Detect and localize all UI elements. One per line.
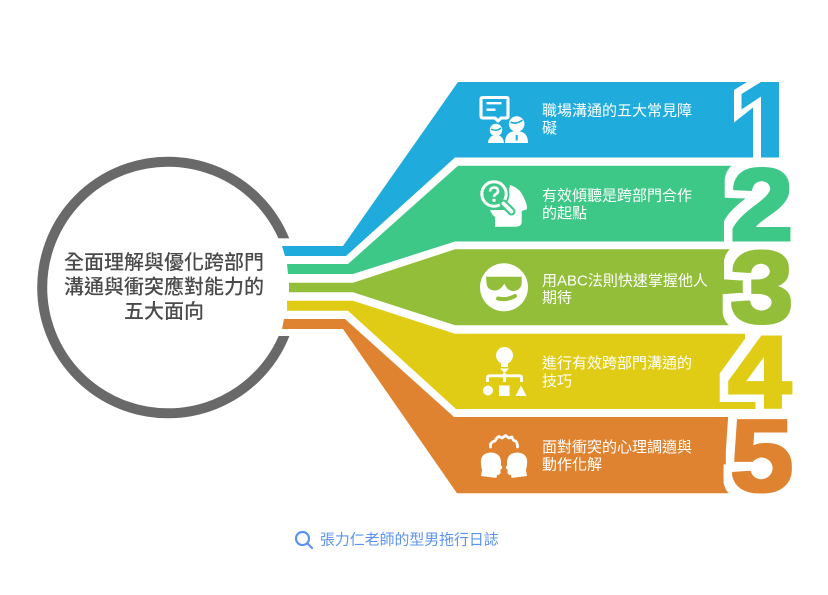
central title: 全面理解與優化跨部門	[64, 251, 264, 274]
band 4	[287, 301, 758, 409]
label 5: 動作化解	[542, 456, 602, 474]
label 2: 有效傾聽是跨部門合作	[542, 188, 692, 204]
label 3	[542, 272, 708, 306]
label 4: 技巧	[542, 373, 572, 390]
panel: step 1	[282, 82, 779, 256]
number 5: 5	[730, 399, 794, 513]
circle ring	[42, 162, 302, 413]
panel: step 3	[289, 230, 794, 344]
label 5	[542, 438, 692, 474]
label 4: 進行有效跨部門溝通的	[542, 355, 692, 372]
number 1: 1	[735, 62, 794, 180]
band 2	[287, 166, 745, 274]
band 3	[289, 249, 745, 325]
panel: step 4	[287, 301, 792, 429]
label 2	[542, 188, 692, 222]
label 2: 的起點	[542, 205, 587, 222]
central title: 五大面向	[124, 300, 204, 323]
number 3: 3	[730, 230, 794, 344]
label 1: 礙	[542, 120, 557, 137]
icon: conversation	[481, 98, 528, 143]
icon: idea flow chart	[483, 347, 526, 396]
icon: smiling face with sunglasses	[480, 263, 528, 311]
icon: two heads in conflict	[481, 436, 527, 478]
icon: head with magnifier	[478, 178, 527, 227]
label 1: 職場溝通的五大常見障	[542, 102, 692, 120]
band 1	[282, 82, 779, 256]
label 3: 用ABC法則快速掌握他人	[542, 272, 708, 290]
footer text: 張力仁老師的型男拖行日誌	[320, 532, 499, 548]
central title: 溝通與衝突應對能力的	[64, 274, 264, 298]
number 2: 2	[730, 148, 794, 262]
label 5: 面對衝突的心理調適與	[542, 438, 692, 456]
band 5	[282, 319, 738, 493]
number 1	[734, 82, 761, 158]
icon: magnifier	[296, 532, 312, 548]
panel: step 2	[287, 148, 794, 274]
central title	[64, 251, 264, 323]
footer: source credit	[296, 532, 499, 548]
label 4	[542, 355, 692, 390]
label 3: 期待	[542, 290, 572, 306]
panel: step 5	[282, 319, 794, 513]
number 4: 4	[728, 315, 792, 429]
label 1	[542, 102, 692, 137]
